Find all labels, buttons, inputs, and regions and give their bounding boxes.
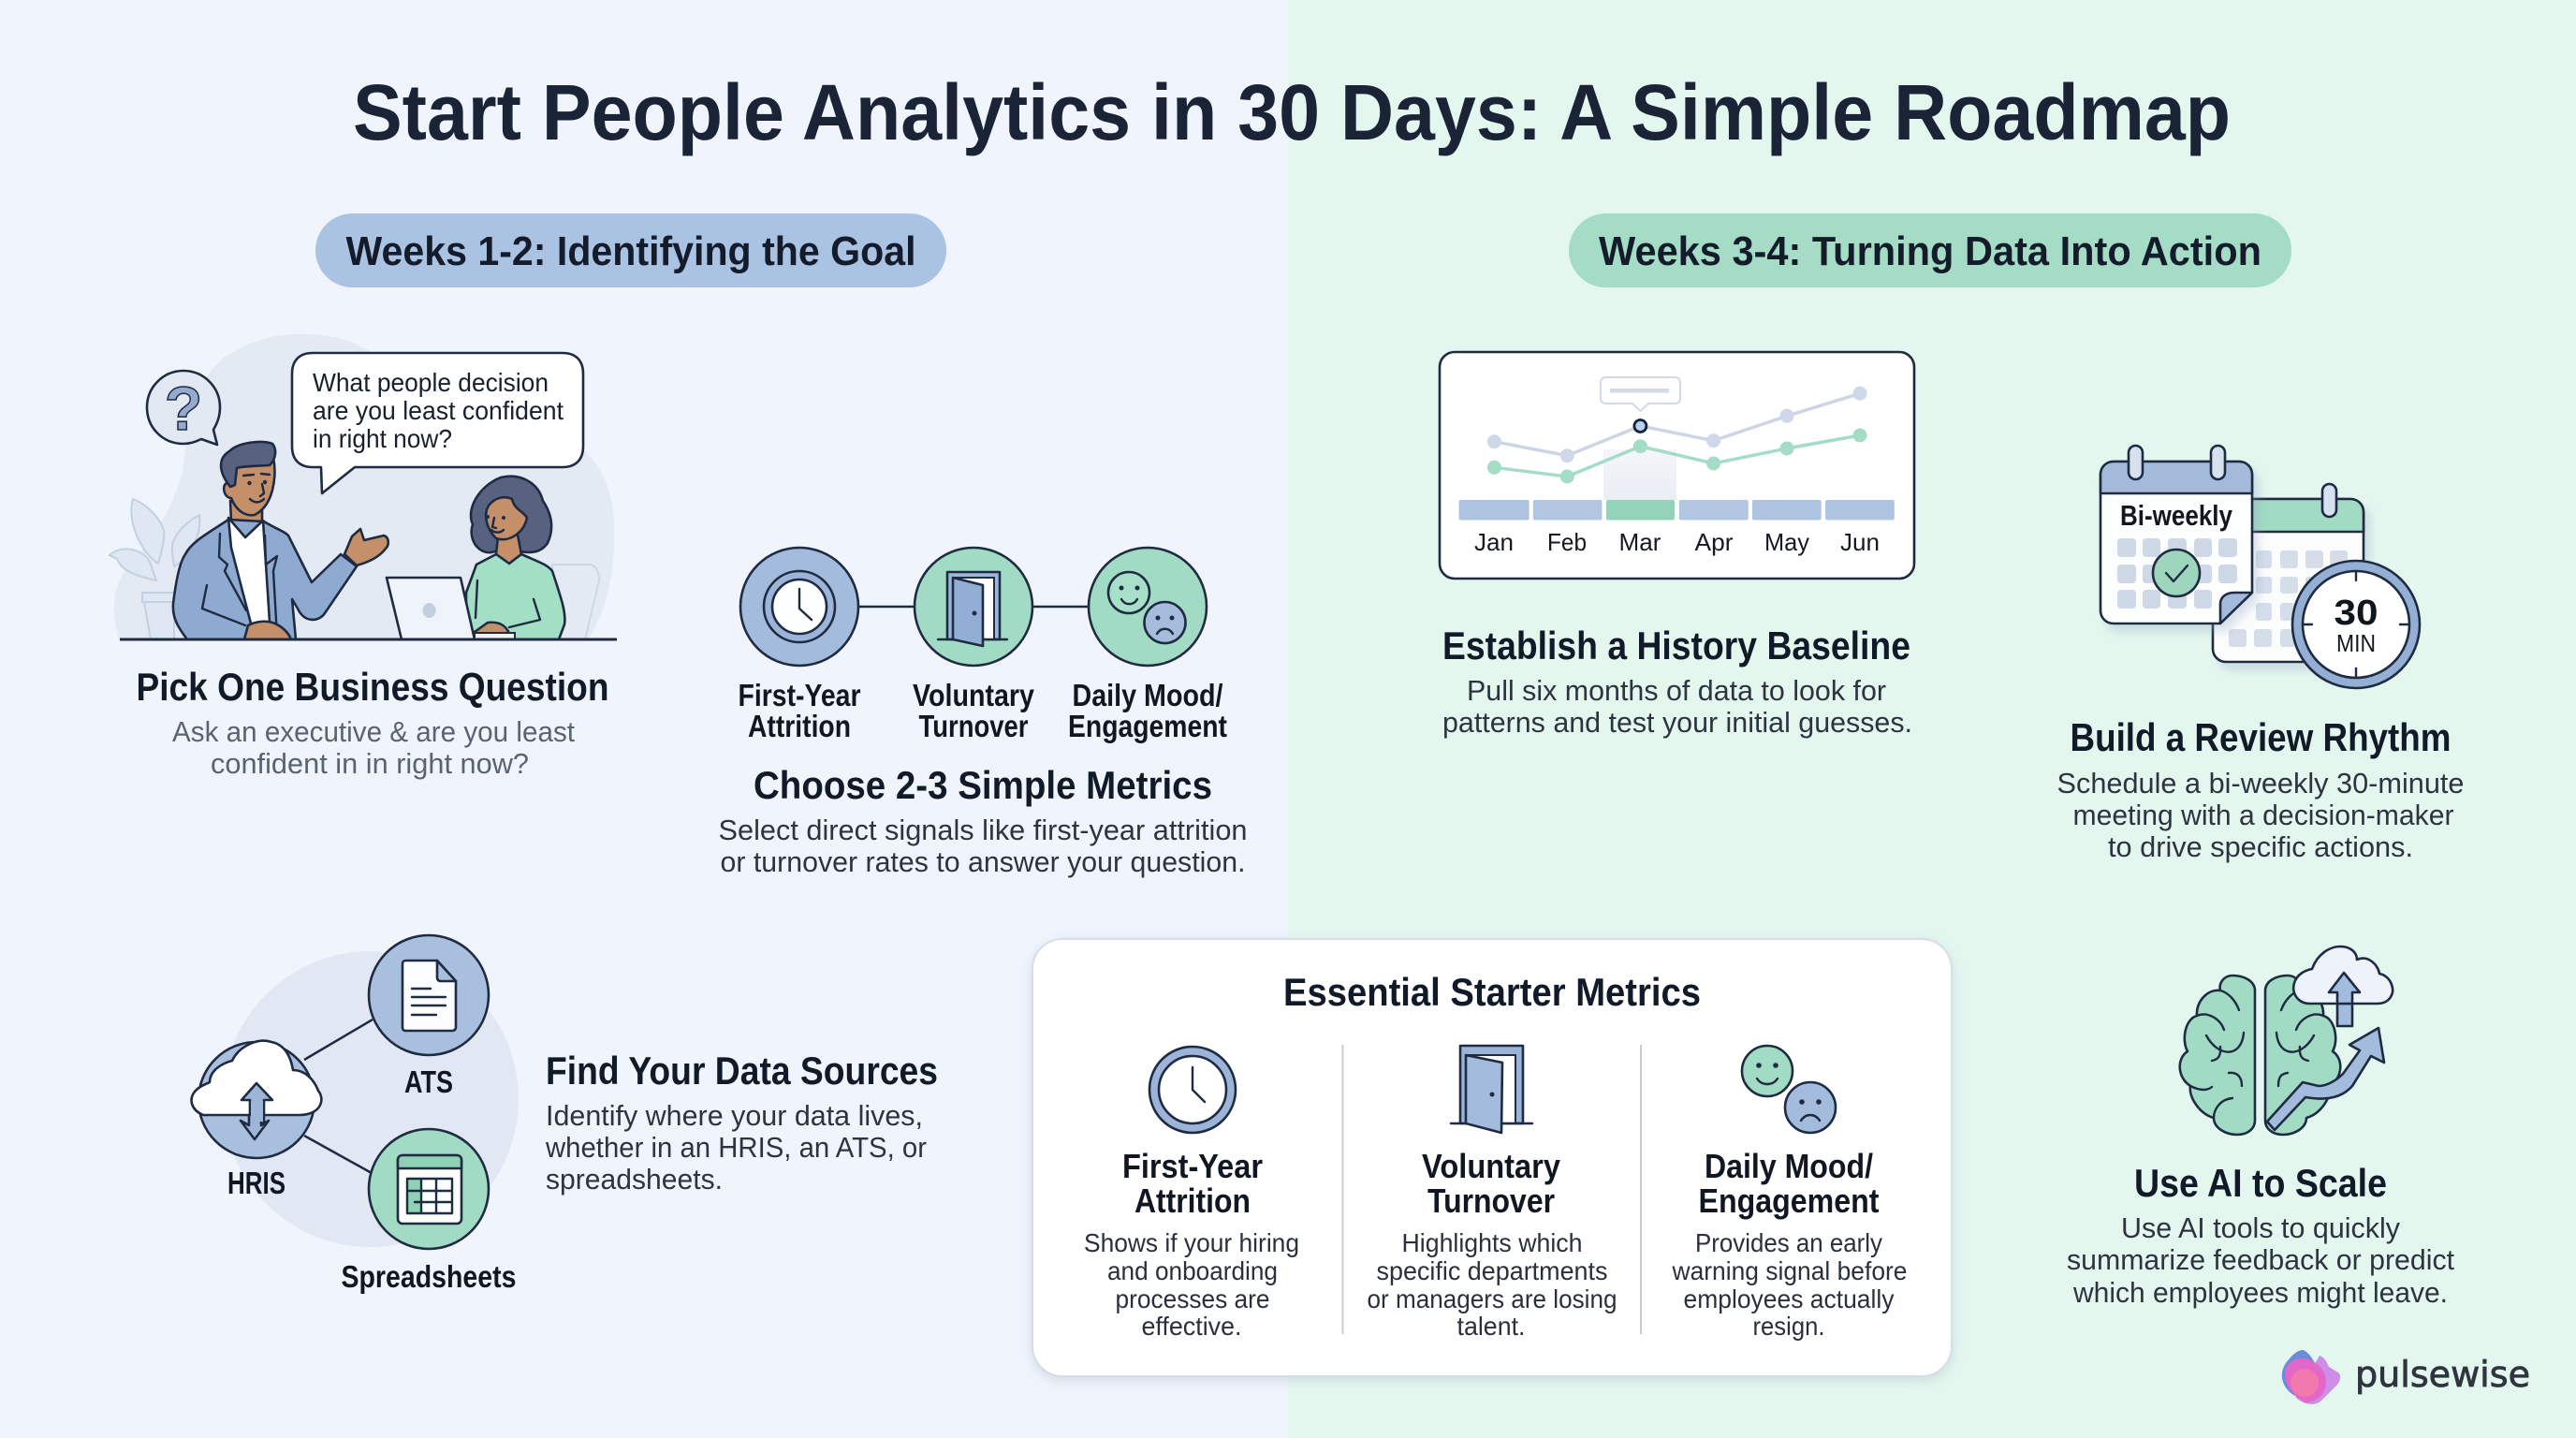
heading: Use AI to Scale (2134, 1161, 2387, 1205)
heading: Choose 2-3 Simple Metrics (754, 763, 1212, 807)
month labels: May (1764, 528, 1809, 556)
description (2057, 767, 2464, 863)
icon: brain with cloud and growth arrow (2180, 946, 2393, 1135)
icon: moods (1742, 1046, 1836, 1133)
metric title: First-Year (1122, 1147, 1263, 1185)
speech bubble: What people decision (313, 368, 549, 397)
network diagram: Spreadsheets (341, 1259, 517, 1294)
icon: moods (1089, 548, 1207, 666)
month labels: Apr (1694, 528, 1734, 556)
icon: calendars and timer (2100, 446, 2420, 688)
table line (120, 638, 617, 640)
description: Pull six months of data to look for (1467, 674, 1886, 707)
metric labels: First-Year (738, 678, 861, 712)
heading pill: weeks 1-2 (315, 213, 946, 287)
line chart card (1440, 352, 1914, 579)
panel: establish a history baseline (1440, 352, 1914, 739)
metric description: Shows if your hiring (1084, 1228, 1299, 1257)
metric description: warning signal before (1672, 1256, 1908, 1285)
connector lines (858, 606, 1089, 608)
description: Select direct signals like first-year attrition (719, 814, 1247, 846)
metric title (1122, 1147, 1263, 1220)
tooltip (1601, 377, 1680, 411)
description (719, 814, 1247, 878)
metric labels: Engagement (1068, 709, 1227, 743)
month labels (1474, 528, 1880, 556)
metric description: talent. (1456, 1312, 1526, 1341)
front calendar: Bi-weekly (2120, 499, 2233, 532)
heading: Establish a History Baseline (1442, 624, 1910, 668)
title: Start People Analytics in 30 Days: A Simple Roadmap (353, 68, 2231, 156)
description: meeting with a decision-maker (2072, 799, 2454, 831)
heading: Essential Starter Metrics (1283, 970, 1701, 1014)
panel: find your data sources (192, 935, 938, 1294)
icon: door (915, 548, 1032, 666)
metric description: resign. (1752, 1312, 1825, 1341)
metric description (1084, 1228, 1299, 1341)
heading pill: weeks 3-4: Weeks 3-4: Turning Data Into Action (1599, 228, 2261, 274)
icon: ATS document (369, 935, 489, 1055)
description: patterns and test your initial guesses. (1442, 706, 1912, 739)
description: Identify where your data lives, (546, 1099, 923, 1132)
bars (1459, 500, 1895, 521)
metric title (1422, 1147, 1560, 1220)
icon: door (1451, 1046, 1532, 1133)
metric description: and onboarding (1107, 1256, 1278, 1285)
icon: HRIS cloud (192, 1041, 321, 1158)
logo: pulsewise (2282, 1350, 2530, 1404)
metric description: or managers are losing (1367, 1284, 1617, 1313)
description (2067, 1211, 2454, 1309)
speech bubble: in right now? (313, 424, 452, 453)
description: confident in in right now? (211, 747, 529, 780)
metric title: Daily Mood/ (1705, 1147, 1873, 1185)
question bubble (147, 371, 220, 445)
metric description (1672, 1228, 1908, 1341)
logo wordmark: pulsewise (2355, 1354, 2530, 1395)
right hemisphere (2265, 976, 2340, 1135)
month labels: Feb (1547, 528, 1587, 556)
metric description (1367, 1228, 1617, 1341)
description: spreadsheets. (546, 1163, 723, 1196)
highlighted point (1634, 419, 1647, 433)
metric title: Engagement (1698, 1181, 1880, 1220)
network diagram (192, 935, 519, 1294)
panel: choose simple metrics (719, 548, 1247, 878)
description: Use AI tools to quickly (2121, 1211, 2400, 1244)
description: summarize feedback or predict (2067, 1243, 2454, 1276)
metric title: Attrition (1134, 1181, 1251, 1220)
metric description: effective. (1142, 1312, 1241, 1341)
front calendar (2100, 446, 2252, 624)
heading: Find Your Data Sources (546, 1049, 938, 1093)
heading pill: weeks 3-4 (1569, 213, 2291, 287)
illustration: two people talking (110, 334, 617, 639)
metric description: specific departments (1376, 1256, 1608, 1285)
description (1442, 674, 1912, 739)
metric labels: Turnover (919, 709, 1029, 743)
description: which employees might leave. (2072, 1276, 2448, 1309)
metric description: Highlights which (1402, 1228, 1582, 1257)
blue line series (1487, 387, 1866, 462)
metric title (1698, 1147, 1880, 1220)
timer: MIN (2336, 629, 2376, 657)
heading pill: weeks 1-2: Weeks 1-2: Identifying the Goal (346, 228, 915, 274)
question bubble: ? (165, 374, 202, 443)
description: whether in an HRIS, an ATS, or (545, 1131, 927, 1164)
growth arrow (2267, 1028, 2384, 1130)
heading: Pick One Business Question (137, 665, 608, 709)
column: first-year attrition (1084, 1047, 1299, 1341)
metric description: processes are (1116, 1284, 1269, 1313)
month labels: Jun (1840, 528, 1880, 556)
metric title: Turnover (1427, 1181, 1555, 1220)
description: Ask an executive & are you least (172, 715, 575, 748)
icon: clock (1149, 1047, 1236, 1133)
up arrow (2329, 973, 2360, 1026)
column: daily mood engagement (1672, 1046, 1908, 1341)
heading: Build a Review Rhythm (2071, 715, 2451, 759)
panel: build a review rhythm (2057, 446, 2464, 863)
description: Schedule a bi-weekly 30-minute (2057, 767, 2464, 800)
metric description: Provides an early (1695, 1228, 1882, 1257)
green line series (1487, 429, 1866, 483)
icon: spreadsheet (369, 1129, 489, 1249)
panel: essential starter metrics (1032, 939, 1952, 1376)
left hemisphere (2180, 976, 2255, 1135)
metric labels: Voluntary (913, 678, 1035, 712)
description (172, 715, 575, 780)
logo mark (2282, 1350, 2340, 1404)
plant (110, 499, 199, 639)
metric title: Voluntary (1422, 1147, 1560, 1185)
speech bubble (292, 353, 583, 493)
chair (552, 565, 599, 639)
speech bubble: are you least confident (313, 396, 564, 425)
timer: 30 (2334, 594, 2378, 633)
panel: pick one business question (110, 334, 617, 780)
woman (466, 477, 564, 639)
timer (2292, 561, 2420, 688)
man (173, 442, 388, 639)
metric labels: Daily Mood/ (1073, 678, 1222, 712)
column: voluntary turnover (1367, 1046, 1617, 1341)
laptop (387, 578, 475, 639)
description: to drive specific actions. (2108, 830, 2413, 863)
network diagram: HRIS (227, 1166, 285, 1200)
metric labels: Attrition (748, 709, 851, 743)
panel: use AI to scale (2067, 946, 2454, 1309)
icon: clock (740, 548, 858, 666)
month labels: Mar (1619, 528, 1661, 556)
metric labels (738, 678, 1227, 743)
month labels: Jan (1474, 528, 1514, 556)
description: or turnover rates to answer your question. (721, 845, 1245, 878)
metric description: employees actually (1683, 1284, 1895, 1313)
description (545, 1099, 927, 1196)
back calendar (2213, 484, 2364, 662)
source labels: ATS (404, 1064, 453, 1099)
cloud (2293, 946, 2393, 1004)
